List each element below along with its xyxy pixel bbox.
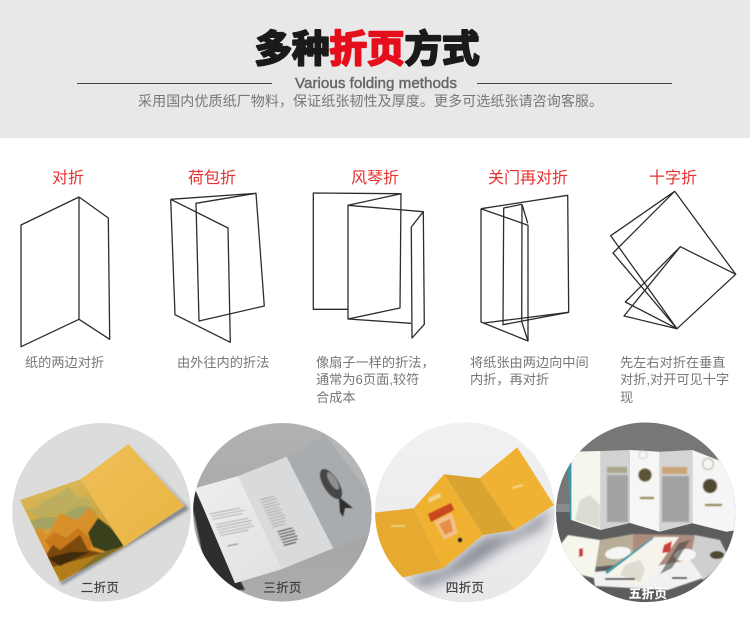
fold type 5: cross fold: 对折,对开可见十字 xyxy=(620,372,729,387)
diagram: cross fold xyxy=(611,191,736,329)
fold type 1: half fold xyxy=(21,169,110,370)
fold type 1: half fold: 对折 xyxy=(52,169,84,187)
fold type 3: accordion fold: 通常为6页面,较符 xyxy=(316,372,419,387)
intro text: 采用国内优质纸厂物料，保证纸张韧性及厚度。更多可选纸张请咨询客服。 xyxy=(138,93,603,109)
header band xyxy=(0,0,750,138)
diagram: accordion fold xyxy=(313,193,424,338)
title: 多种折页方式 xyxy=(254,18,480,73)
brochure details xyxy=(575,451,722,528)
fold type 4: gate fold: 将纸张由两边向中间 xyxy=(470,355,589,370)
fold type 5: cross fold: 十字折 xyxy=(649,169,697,187)
caption: 二折页 xyxy=(81,581,119,595)
fold type 1: half fold: 纸的两边对折 xyxy=(25,355,104,370)
fold type 2: wallet fold: 由外往内的折法 xyxy=(177,355,269,370)
english subtitle with rules: Various folding methods xyxy=(295,76,457,92)
fold type 5: cross fold: 现 xyxy=(620,390,633,405)
diagram: wallet fold xyxy=(171,193,264,342)
photo: five-fold brochure xyxy=(553,420,743,607)
lower brochure spread xyxy=(560,534,730,590)
fish image xyxy=(319,468,354,518)
caption: 五折页 xyxy=(629,586,667,601)
diagram: half fold xyxy=(21,197,110,347)
fold type 4: gate fold xyxy=(470,169,589,387)
caption: 三折页 xyxy=(263,581,302,595)
caption: 四折页 xyxy=(446,581,484,595)
fold type 3: accordion fold: 合成本 xyxy=(316,390,356,405)
photo: three-fold brochure xyxy=(190,420,375,605)
fold type 3: accordion fold: 风琴折 xyxy=(351,169,399,187)
fold type 2: wallet fold xyxy=(171,169,269,370)
photo: two-fold brochure xyxy=(10,420,195,605)
text lines on panels xyxy=(210,495,300,546)
fold type 3: accordion fold xyxy=(313,169,435,405)
fold type 2: wallet fold: 荷包折 xyxy=(188,169,236,187)
fold type 5: cross fold xyxy=(611,169,736,405)
fold type 4: gate fold: 内折，再对折 xyxy=(470,372,549,387)
photo: four-fold brochure xyxy=(372,420,558,605)
fold type 4: gate fold: 关门再对折 xyxy=(488,169,568,187)
fold type 3: accordion fold: 像扇子一样的折法， xyxy=(316,355,435,370)
brochure artwork xyxy=(391,484,523,542)
fold type 5: cross fold: 先左右对折在垂直 xyxy=(620,355,726,370)
diagram: gate fold xyxy=(481,195,569,341)
